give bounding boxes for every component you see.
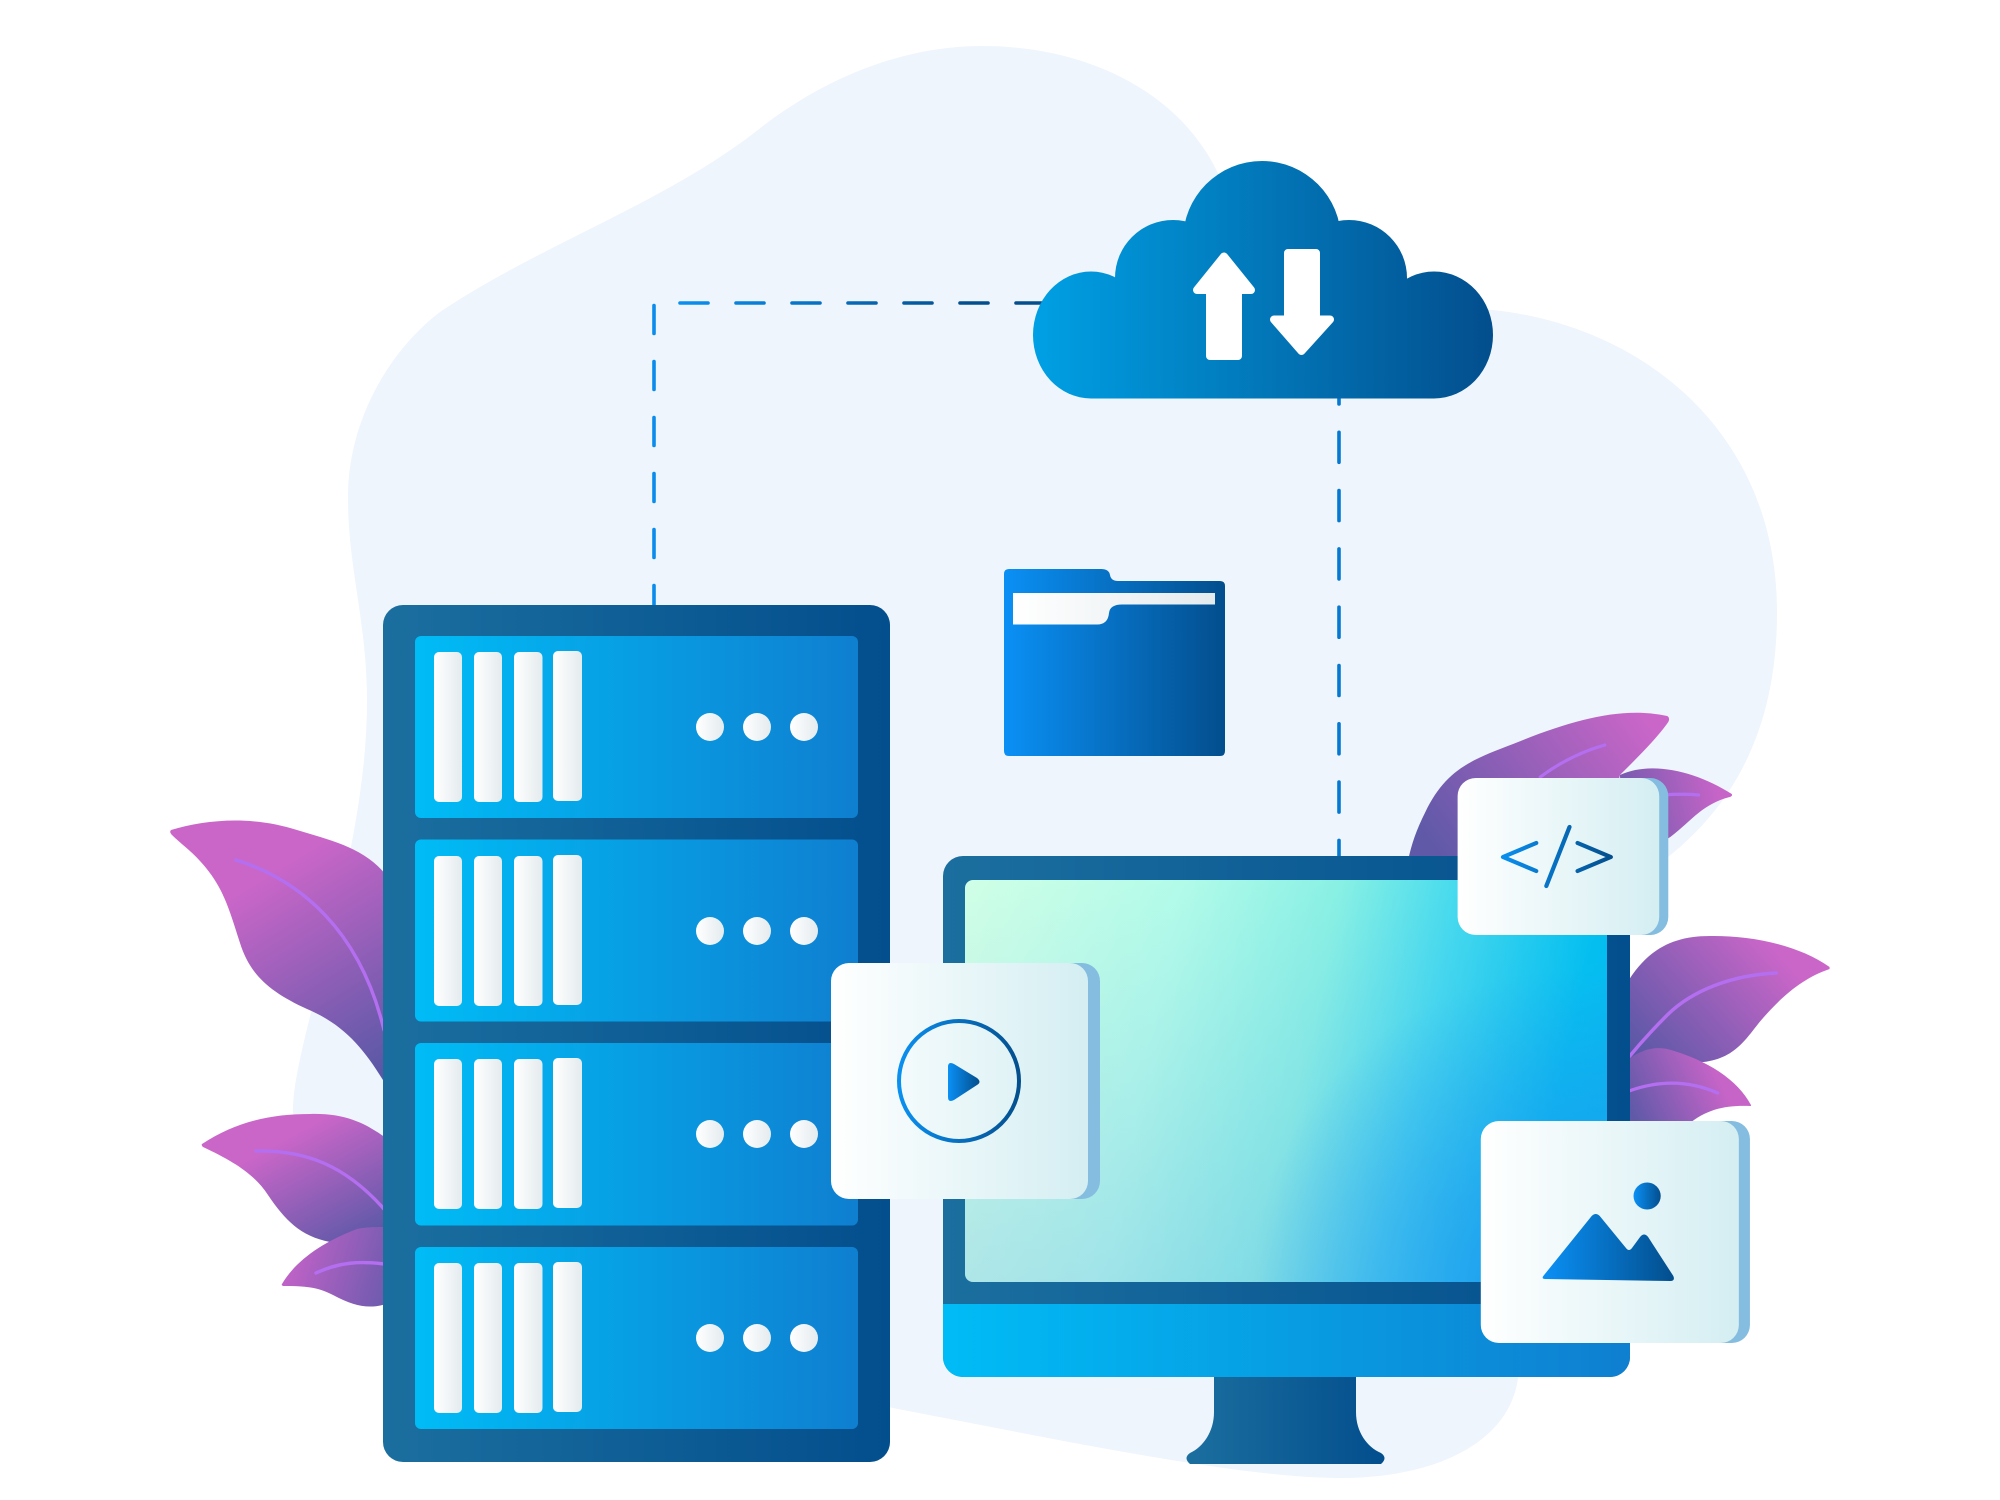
leaf vein [256,1151,384,1209]
cloud icon [1033,161,1493,398]
leaf: top right small [1620,768,1732,848]
monitor chin [943,1304,1630,1377]
download arrow [1274,253,1330,351]
monitor stand [1186,1370,1384,1464]
card face [1481,1121,1739,1343]
leaf vein [236,860,384,1030]
sun [1634,1182,1661,1210]
image card [1481,1121,1750,1343]
leaf vein [1662,793,1699,797]
leaf: right large [1627,936,1830,1062]
card shadow edge [1040,963,1100,1199]
folder paper [1013,593,1215,624]
upload arrow [1197,256,1251,356]
mountains [1543,1214,1674,1281]
icon: code brackets [1503,827,1611,886]
server rack [383,605,890,1462]
server unit 4 [415,1247,858,1429]
server unit 1 [415,636,858,818]
server unit 3 [415,1043,858,1226]
server frame [383,605,890,1462]
monitor [943,856,1630,1464]
monitor frame [943,856,1630,1377]
card shadow edge [1622,778,1668,935]
icon: picture [1543,1182,1674,1281]
right leaves [1408,713,1830,1125]
leaf: small left [282,1227,386,1307]
leaf: top right large [1408,713,1669,860]
leaf vein [1629,973,1776,1057]
leaf vein [1540,745,1605,777]
dashed connector: server to cloud [654,303,1050,606]
leaf: right small [1627,1048,1751,1125]
leaf: large left [170,821,386,1085]
monitor screen [965,880,1607,1282]
leaf: middle left [202,1114,386,1250]
folder body [1004,569,1225,756]
leaf vein [1629,1083,1718,1093]
left leaves [170,821,386,1307]
leaf vein [316,1263,384,1273]
cloud shape [1033,161,1493,398]
background blob [293,46,1777,1478]
dashed connector: cloud to monitor [1337,374,1341,856]
icon: play circle [899,1021,1019,1141]
server unit 2 [415,840,858,1022]
horizontal dashed segment [680,301,1050,305]
card face [1458,778,1659,935]
code card [1458,778,1668,935]
video card [831,963,1100,1199]
vertical dashed segment [652,306,656,606]
card shadow edge [1692,1121,1750,1343]
card face [831,963,1088,1199]
folder icon [1004,569,1225,756]
